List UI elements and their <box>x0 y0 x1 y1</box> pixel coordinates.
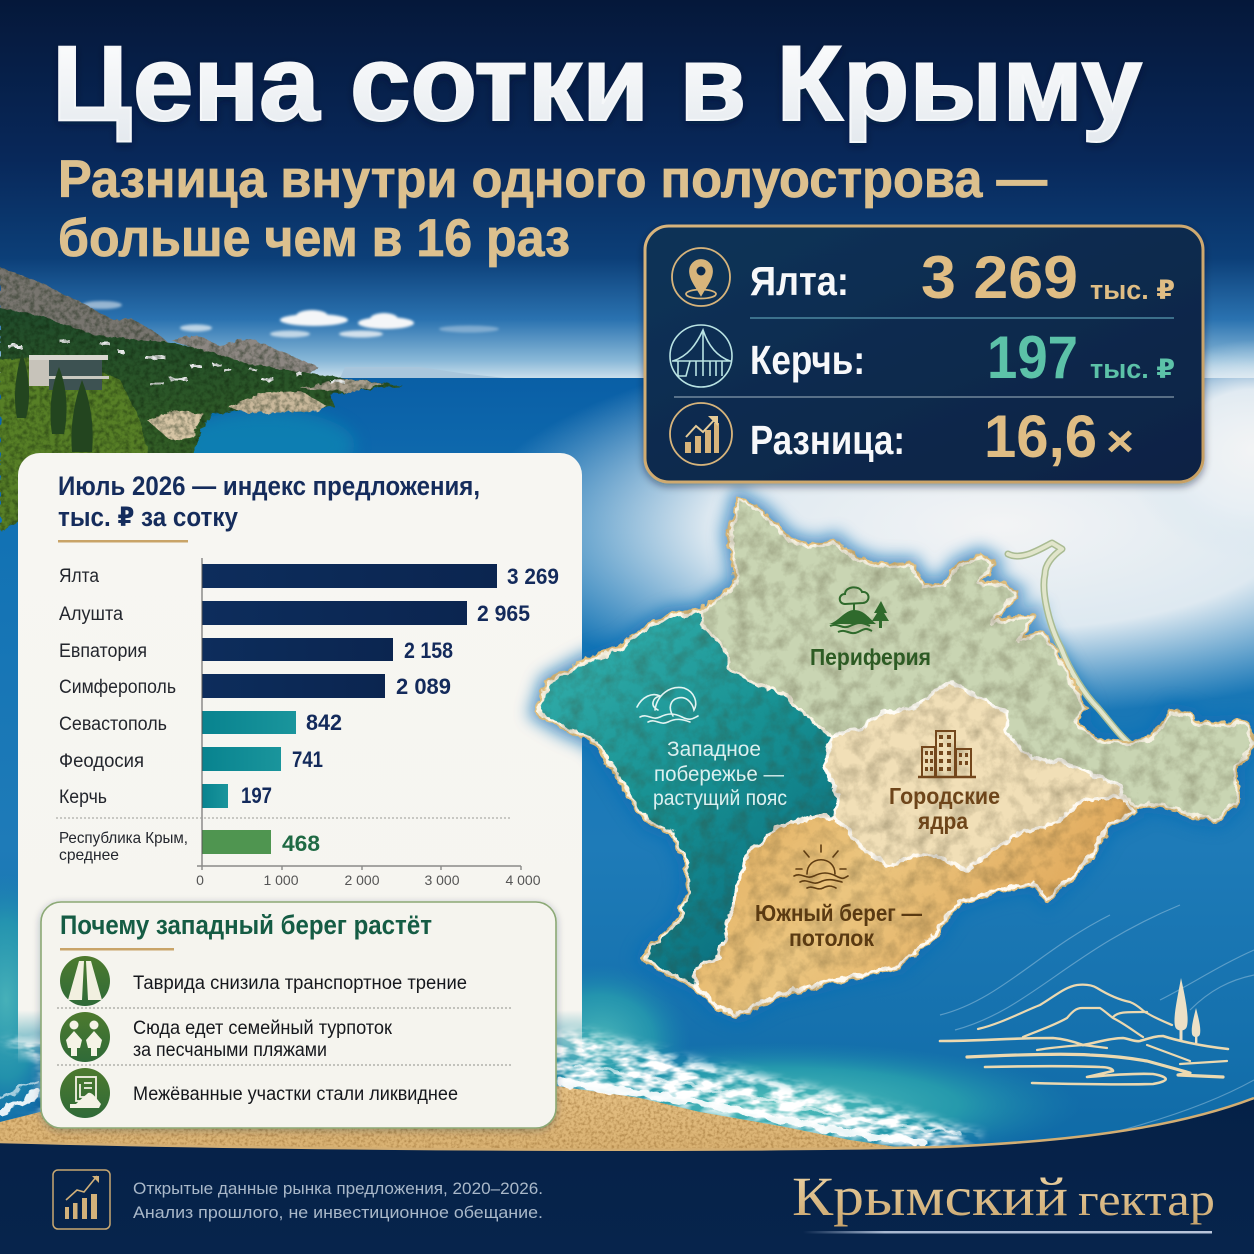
map of Crimea <box>539 500 1253 1015</box>
subtitle: Разница внутри одного полуострова — <box>58 150 1047 209</box>
bar chart: 3 000 <box>424 872 460 888</box>
bar chart <box>56 558 559 888</box>
subtitle <box>58 150 1047 268</box>
heading rule <box>60 948 174 950</box>
icon: location pin <box>672 248 730 306</box>
label: urban cores <box>889 783 1000 834</box>
bar chart: 2 089 <box>396 674 451 699</box>
icon: wave <box>637 687 698 723</box>
background: sea <box>0 378 1254 1158</box>
shore: surf foam <box>0 1066 960 1144</box>
chart heading <box>58 471 480 532</box>
icon: periphery tree and hill <box>829 587 889 633</box>
row: Kerch: 197 <box>987 324 1078 391</box>
logo underline <box>803 1231 1212 1234</box>
row: Yalta <box>750 244 1175 311</box>
background: shallow water under coast <box>175 410 355 480</box>
label: west coast: растущий пояс <box>653 787 787 810</box>
region: urban cores <box>825 682 1121 871</box>
bar chart: Алушта <box>59 604 123 625</box>
photo: coastal mountains and villa <box>0 267 404 530</box>
footer band <box>0 1098 1254 1254</box>
icon: city buildings <box>918 731 976 777</box>
reason 3: Межёванные участки стали ликвиднее <box>133 1084 458 1105</box>
bar chart: 741 <box>292 747 323 772</box>
region: periphery <box>701 500 1253 819</box>
region: west coast <box>539 612 837 985</box>
bar chart: 3 269 <box>507 564 559 589</box>
icon: sun over sea <box>794 845 848 889</box>
label: urban cores: ядра <box>917 808 968 834</box>
icon: bridge <box>670 325 732 387</box>
shore: foam field <box>0 1030 985 1150</box>
background: pale mist behind map <box>470 335 1254 715</box>
icon: family <box>60 1012 110 1062</box>
label: urban cores: Городские <box>889 783 1000 809</box>
row: Yalta: Ялта: <box>750 258 849 304</box>
bar chart: Ялта <box>59 566 99 587</box>
label: south coast <box>755 900 922 951</box>
bar chart: 2 965 <box>477 601 530 626</box>
logo: Крымский гектар: Крымский <box>792 1166 1068 1227</box>
panel: why the west coast grows <box>41 902 556 1128</box>
bar chart: Керчь <box>59 787 107 808</box>
map gold coastline <box>539 500 1253 1015</box>
bar chart: Симферополь <box>59 677 176 698</box>
bar chart: 842 <box>306 710 342 735</box>
row: difference: 16,6 <box>984 403 1097 470</box>
heading rule <box>58 540 188 542</box>
bar chart: Евпатория <box>59 641 147 662</box>
spit: Arabat <box>1008 543 1130 744</box>
chart heading: Июль 2026 — индекс предложения, <box>58 471 480 501</box>
row: Kerch <box>750 324 1175 391</box>
map shadow halo <box>539 500 1253 1015</box>
footer note <box>133 1179 543 1222</box>
footer note: Открытые данные рынка предложения, 2020–2026. <box>133 1179 543 1198</box>
bar chart: среднее <box>59 847 119 864</box>
reason 2: за песчаными пляжами <box>133 1040 327 1061</box>
logo: Крымский гектар: гектар <box>1078 1174 1215 1225</box>
icon: footer growth chart <box>53 1170 110 1229</box>
reason 2: Сюда едет семейный турпоток <box>133 1018 393 1039</box>
row: Yalta: 3 269 <box>921 244 1078 311</box>
bar chart: 468 <box>282 831 320 856</box>
bar chart: 2 158 <box>404 638 453 663</box>
row: Yalta: тыс. ₽ <box>1090 275 1175 305</box>
bar chart: 1 000 <box>263 872 299 888</box>
title: Цена сотки в Крыму <box>52 23 1142 143</box>
footer gold curve <box>0 1098 1254 1150</box>
row: difference: Разница: <box>750 417 905 463</box>
row: Kerch: тыс. ₽ <box>1090 354 1175 384</box>
label: west coast: побережье — <box>654 763 784 786</box>
bar chart: 197 <box>241 783 272 808</box>
shore: shallow turquoise water <box>0 870 1080 1167</box>
chart heading: тыс. ₽ за сотку <box>58 502 238 532</box>
photo: modern villa <box>29 355 109 390</box>
background: distant ridge <box>340 367 505 378</box>
background: clouds <box>82 301 499 338</box>
bar chart: 0 <box>196 872 204 888</box>
row: Kerch: Керчь: <box>750 337 865 383</box>
label: south coast: Южный берег — <box>755 900 922 926</box>
reason 1: Таврида снизила транспортное трение <box>133 973 467 994</box>
bar chart: Феодосия <box>59 751 144 772</box>
region: south coast <box>694 796 1135 1015</box>
icon: road <box>60 956 110 1006</box>
bar chart: Севастополь <box>59 714 167 735</box>
icon: land document <box>60 1068 110 1118</box>
line art: gold mountains and cypresses <box>940 985 1228 1084</box>
subtitle: больше чем в 16 раз <box>58 209 570 268</box>
bar chart: 2 000 <box>344 872 380 888</box>
footer note: Анализ прошлого, не инвестиционное обещание. <box>133 1203 543 1222</box>
label: periphery: Периферия <box>810 644 931 670</box>
label: south coast: потолок <box>789 925 874 951</box>
reason 2 <box>133 1018 393 1061</box>
bar chart: Республика Крым, <box>59 830 188 847</box>
row: difference: × <box>1106 417 1134 466</box>
panel heading: Почему западный берег растёт <box>60 910 432 940</box>
row: difference <box>750 403 1134 470</box>
icon: growth chart <box>670 403 732 465</box>
background: night-blue sky <box>0 0 1254 380</box>
background: sea swirl lines <box>940 905 1254 1145</box>
icon: small cypress pair <box>1174 978 1200 1043</box>
label: west coast <box>653 738 787 810</box>
panel: key stats box <box>645 226 1203 482</box>
label: west coast: Западное <box>667 738 761 761</box>
logo: Крымский гектар <box>792 1166 1215 1227</box>
bar chart: 4 000 <box>505 872 541 888</box>
shore: sandy beach <box>0 1086 930 1156</box>
icon: cypresses in photo <box>15 353 93 452</box>
panel: bar chart card <box>18 453 582 1110</box>
